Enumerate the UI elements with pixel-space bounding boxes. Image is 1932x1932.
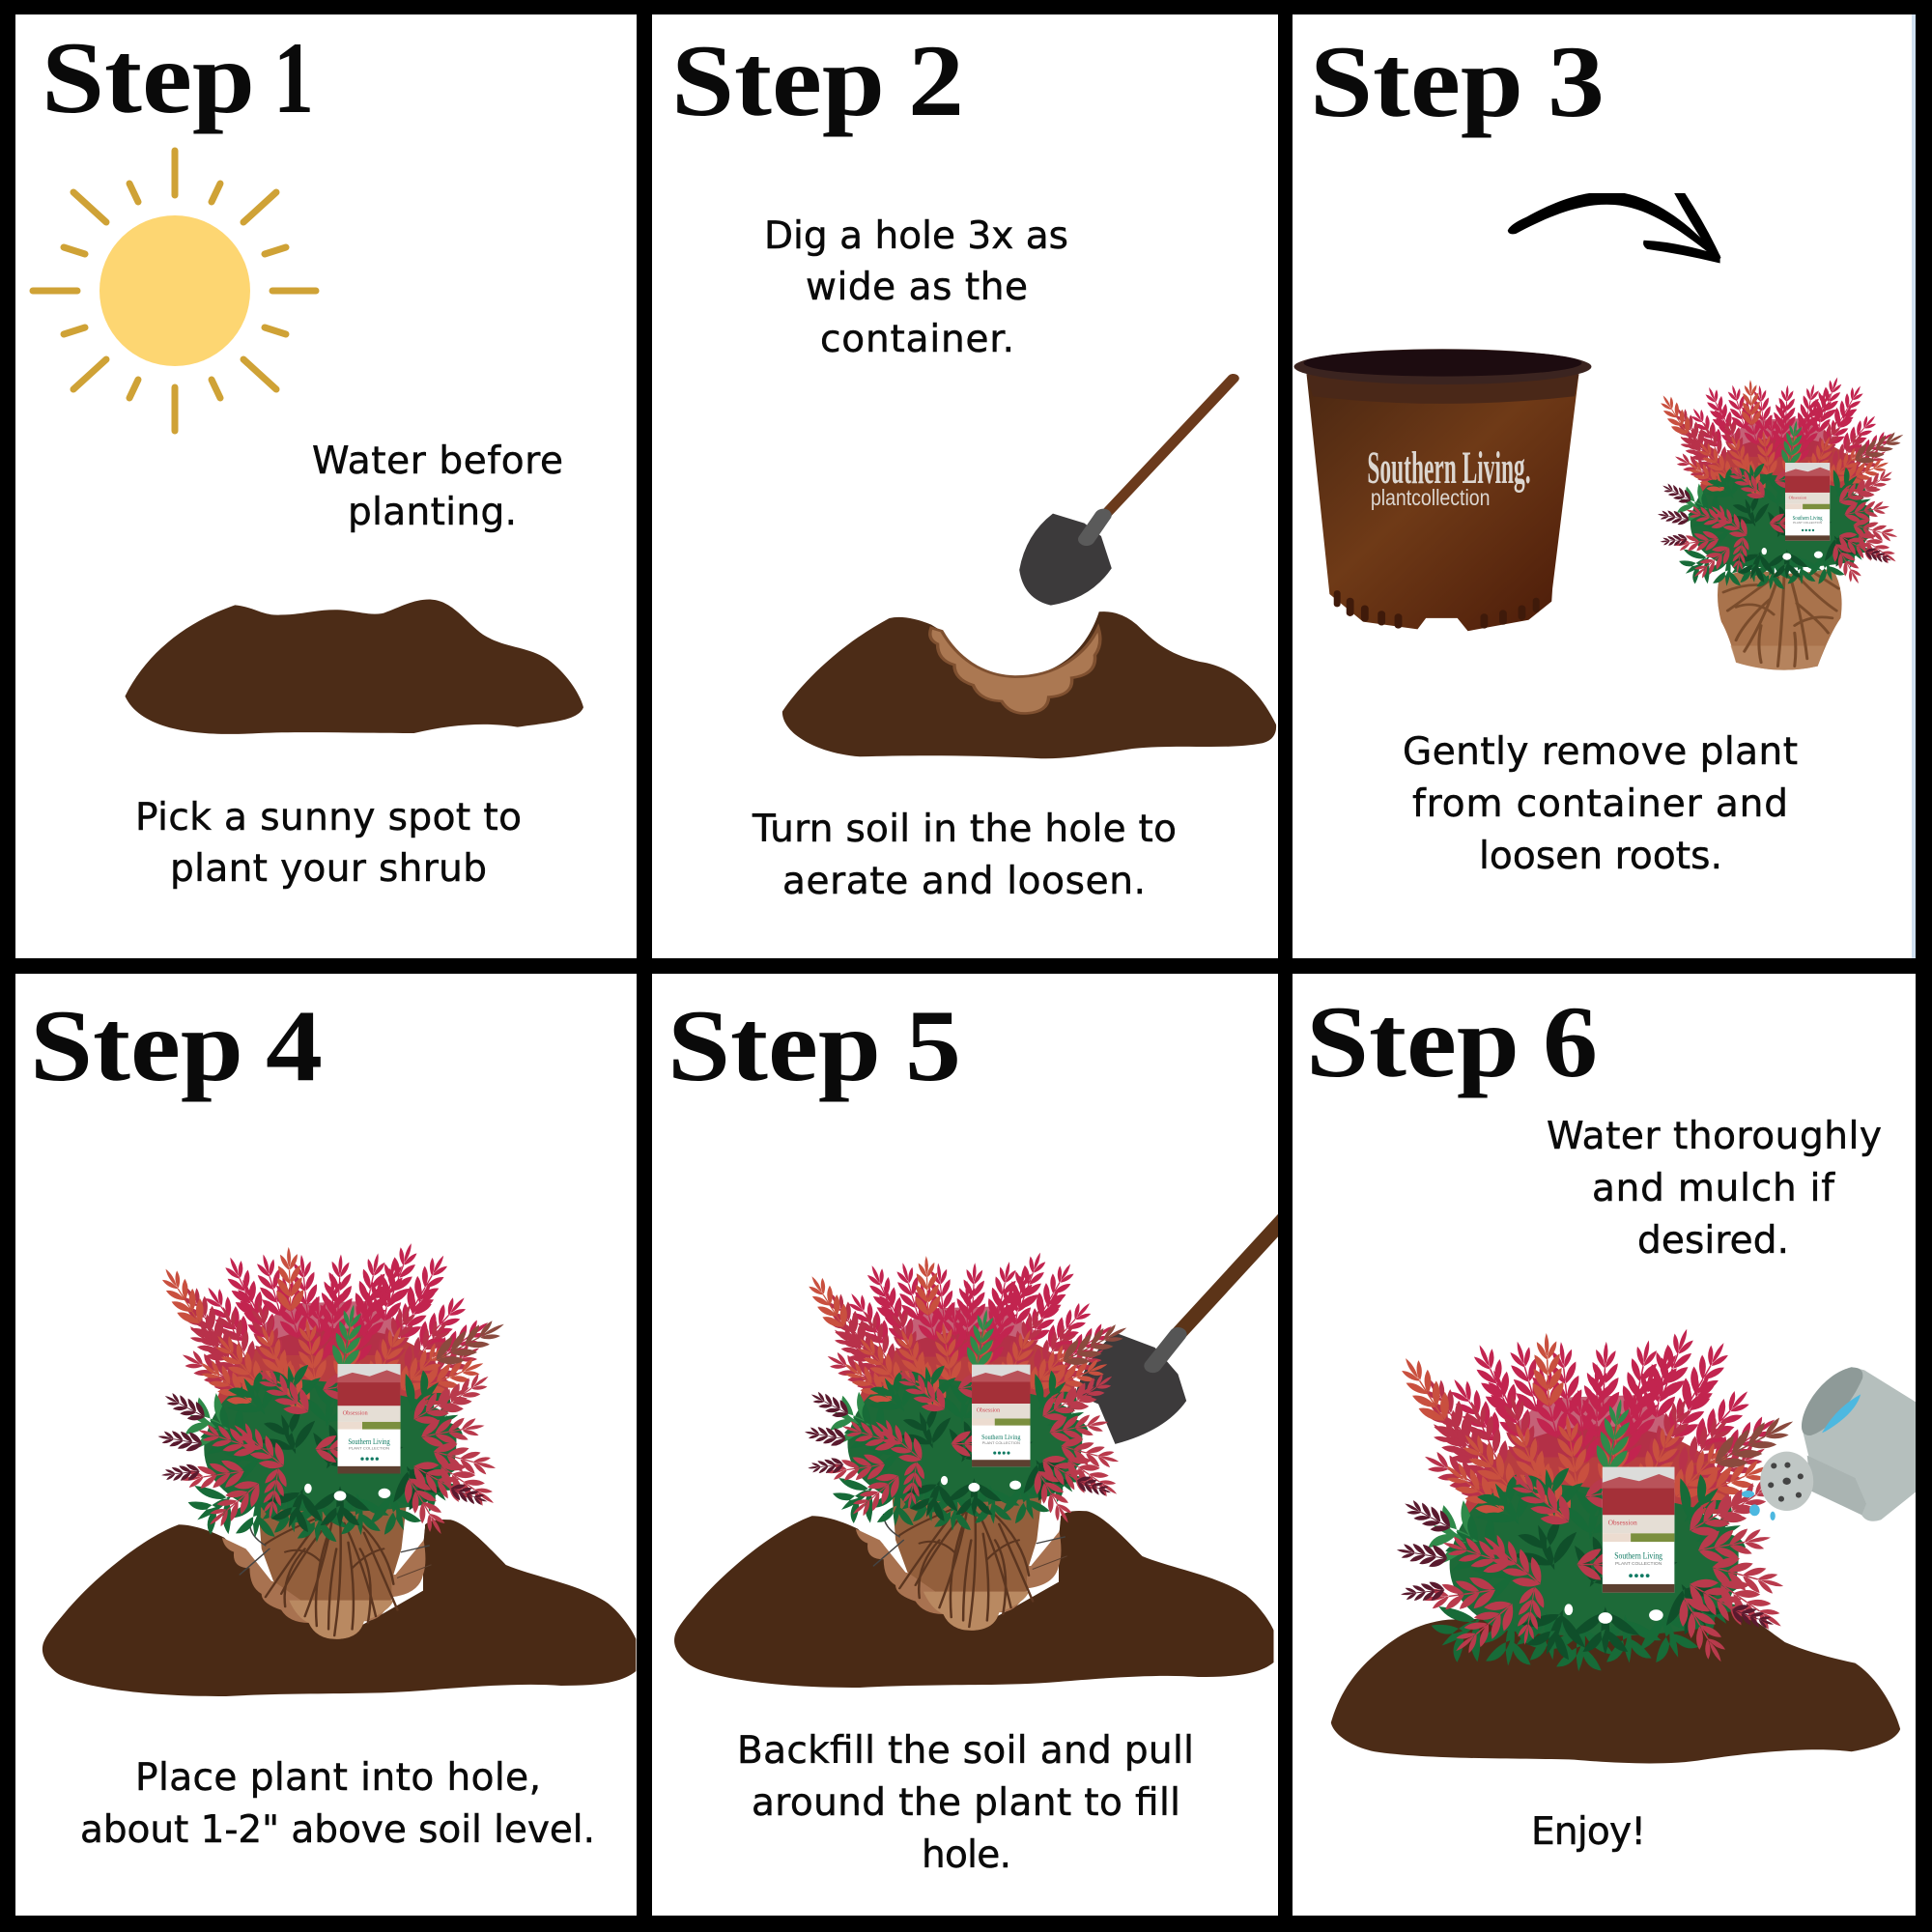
heading: step 5 <box>668 989 961 1102</box>
icon: watering can <box>1742 1367 1929 1521</box>
soil with root ball <box>674 1489 1273 1688</box>
icon: shovel backfilling <box>1075 1211 1292 1444</box>
text: dig a hole: wide as the <box>806 266 1028 309</box>
text: dig a hole: Dig a hole 3x as <box>764 214 1068 258</box>
plant in hole <box>155 1238 510 1545</box>
text: pick a sunny spot: Pick a sunny spot to <box>135 796 522 839</box>
text: dig a hole <box>764 214 1068 361</box>
soil mound <box>125 600 583 734</box>
text: gently remove plant <box>1403 730 1798 878</box>
text: water thoroughly: Water thoroughly <box>1547 1115 1882 1158</box>
text: pick a sunny spot: plant your shrub <box>170 847 487 891</box>
text: turn soil <box>752 808 1177 903</box>
panel: step 2 <box>652 14 1278 958</box>
icon: brown nursery pot <box>1294 349 1591 631</box>
heading: step 5: Step <box>668 989 881 1102</box>
text: backfill: hole. <box>922 1833 1011 1877</box>
icon: sun <box>33 151 316 431</box>
heading: step 6 <box>1306 985 1598 1098</box>
heading: step 2: Step <box>671 24 885 137</box>
heading: step 3 <box>1310 25 1605 138</box>
text: water thoroughly: desired. <box>1637 1219 1789 1263</box>
heading: step 4: 4 <box>266 989 323 1102</box>
pot logo <box>1367 442 1531 511</box>
pot logo: plantcollection <box>1371 486 1490 511</box>
heading: step 3: Step <box>1310 25 1523 138</box>
icon: shovel <box>1019 379 1234 606</box>
soil mound with hole <box>782 611 1276 758</box>
text: place plant: about 1-2" above soil level. <box>80 1808 595 1852</box>
heading: step 2: 2 <box>908 24 964 137</box>
heading: step 4: Step <box>30 989 243 1102</box>
plant removed from container <box>1655 374 1908 591</box>
plant planted and mulched <box>1392 1323 1801 1674</box>
panel: step 4 <box>15 974 637 1916</box>
heading: step 6: 6 <box>1543 985 1598 1098</box>
text: backfill <box>737 1729 1194 1877</box>
plant being backfilled <box>801 1248 1132 1533</box>
text: water before planting: Water before <box>312 440 563 483</box>
panel: step 5 <box>652 974 1292 1916</box>
text: place plant <box>80 1756 595 1852</box>
heading: step 5: 5 <box>905 989 961 1102</box>
text: turn soil: Turn soil in the hole to <box>752 808 1177 851</box>
panel: step 6 <box>1293 974 1929 1916</box>
text: place plant: Place plant into hole, <box>135 1756 541 1800</box>
heading: step 1: 1 <box>273 21 314 134</box>
heading: step 4 <box>30 989 323 1102</box>
heading: step 6: Step <box>1306 985 1520 1098</box>
panel: step 1 <box>15 14 637 958</box>
text: pick a sunny spot <box>135 796 522 891</box>
text: gently remove plant: Gently remove plant <box>1403 730 1798 774</box>
soil mound <box>1331 1611 1900 1763</box>
text: enjoy: Enjoy! <box>1531 1810 1646 1854</box>
text: backfill: Backfill the soil and pull <box>737 1729 1194 1773</box>
icon: brown nursery pot: Southern Living. <box>1367 442 1531 494</box>
root ball <box>1718 568 1842 670</box>
heading: step 1: Step <box>42 21 255 134</box>
text: water thoroughly: and mulch if <box>1592 1167 1835 1210</box>
arrow <box>1508 191 1720 263</box>
text: water thoroughly <box>1547 1115 1882 1263</box>
text: backfill: around the plant to fill <box>752 1781 1180 1825</box>
soil with root ball in hole <box>43 1497 636 1696</box>
panel: step 3 <box>1293 14 1916 958</box>
text: turn soil: aerate and loosen. <box>782 860 1146 903</box>
heading: step 3: 3 <box>1548 25 1605 138</box>
heading: step 2 <box>671 24 964 137</box>
text: gently remove plant: loosen roots. <box>1479 835 1722 878</box>
text: dig a hole: container. <box>820 318 1014 361</box>
text: water before planting <box>312 440 563 534</box>
text: water before planting: planting. <box>348 491 517 534</box>
text: gently remove plant: from container and <box>1412 782 1788 826</box>
